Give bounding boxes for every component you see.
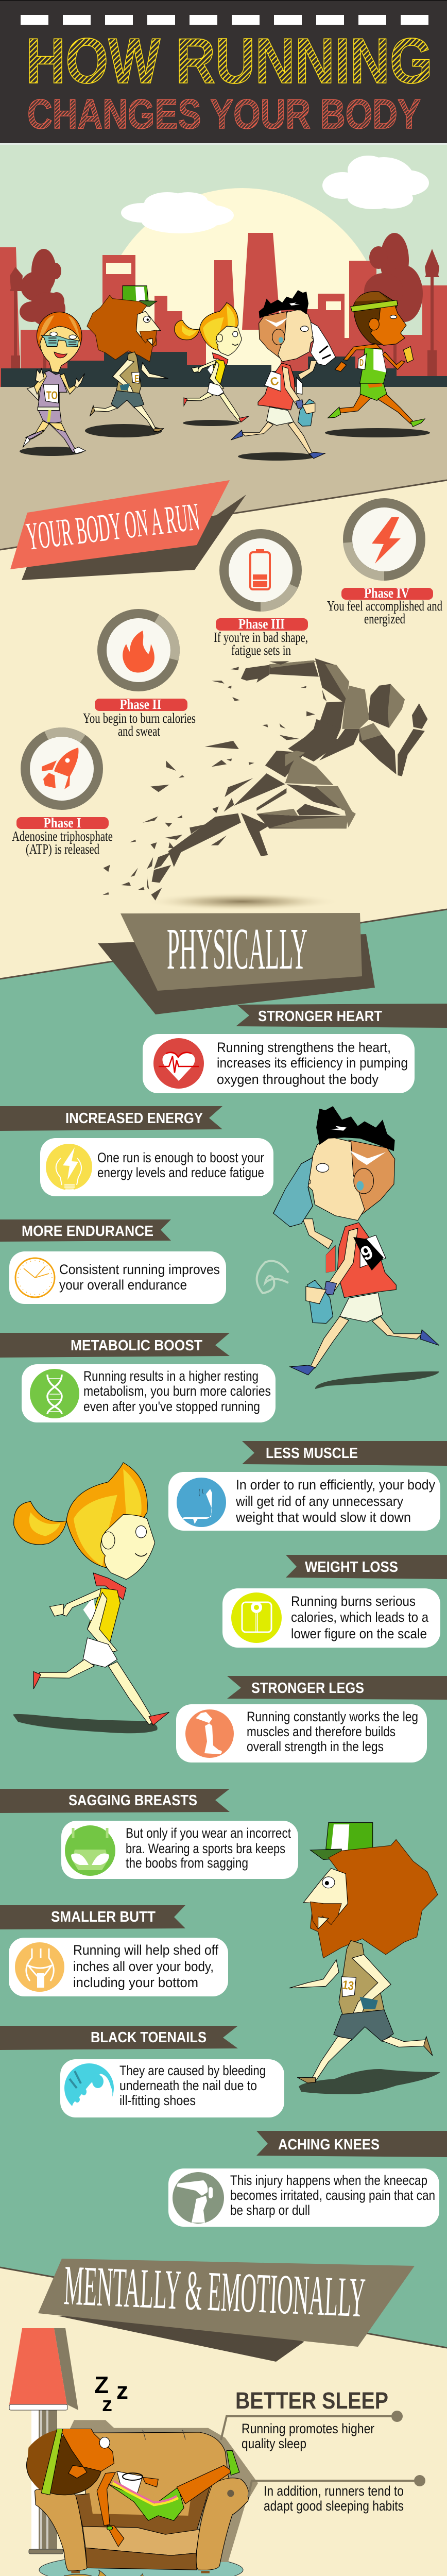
aching knees xyxy=(168,2131,447,2227)
bib number: 13 xyxy=(341,1978,355,1993)
more endurance: MORE ENDURANCE xyxy=(22,1223,153,1240)
banner: your body on a run: YOUR BODY ON A RUN xyxy=(24,495,202,558)
dark skyline xyxy=(1,352,447,387)
black toenails: underneath the nail due to xyxy=(119,2078,257,2093)
metabolic boost: Running results in a higher resting xyxy=(83,1368,259,1384)
sleeping z's xyxy=(94,2371,128,2416)
runner: blonde large xyxy=(13,1463,169,1733)
increased energy: One run is enough to boost your xyxy=(97,1150,264,1165)
icon: scale xyxy=(231,1592,282,1643)
sleeping z's: z xyxy=(102,2393,112,2416)
sleeping man xyxy=(26,2436,102,2495)
runner bib numbers: C xyxy=(268,374,281,389)
runner bib numbers: D xyxy=(359,358,364,368)
city scene background xyxy=(0,145,447,552)
rug xyxy=(39,2554,243,2576)
sagging breasts: the boobs from sagging xyxy=(126,1855,248,1871)
phase IV xyxy=(327,503,442,626)
banner: physically xyxy=(98,913,375,1014)
stronger heart: increases its efficiency in pumping xyxy=(217,1055,408,1071)
stronger heart xyxy=(143,1004,447,1093)
better sleep text: adapt good sleeping habits xyxy=(264,2498,404,2514)
runner bib numbers: TO xyxy=(46,389,58,402)
icon: heart xyxy=(153,1038,204,1089)
banner: your body on a run xyxy=(10,480,246,580)
teal towel xyxy=(273,1158,313,1227)
icon: dna xyxy=(30,1369,79,1418)
phase I: (ATP) is released xyxy=(26,841,99,857)
stronger heart: STRONGER HEART xyxy=(258,1008,382,1025)
more endurance xyxy=(0,1219,226,1304)
sleeping z's: z xyxy=(116,2377,128,2404)
better sleep text xyxy=(221,2387,425,2514)
metabolic boost: metabolism, you burn more calories xyxy=(83,1383,271,1399)
armchair xyxy=(85,2432,234,2517)
sagging breasts: But only if you wear an incorrect xyxy=(126,1825,291,1841)
cat xyxy=(61,2570,158,2576)
weight loss: calories, which leads to a xyxy=(291,1609,429,1625)
stronger legs: overall strength in the legs xyxy=(247,1739,384,1754)
icon: arm xyxy=(177,1478,226,1527)
cream mental section background xyxy=(0,2267,447,2576)
weight loss xyxy=(222,1555,447,1648)
smaller butt: Running will help shed off xyxy=(73,1942,218,1958)
sagging breasts: SAGGING BREASTS xyxy=(68,1792,197,1809)
more endurance: Consistent running improves xyxy=(59,1262,220,1277)
phase II: Phase II xyxy=(119,697,162,712)
floor lamp xyxy=(9,2328,78,2554)
weight loss: lower figure on the scale xyxy=(291,1626,427,1641)
icon: clock xyxy=(15,1258,55,1297)
cloud right xyxy=(322,156,429,209)
phase II: You begin to burn calories xyxy=(83,710,196,726)
black toenails: They are caused by bleeding xyxy=(119,2063,266,2078)
less muscle: will get rid of any unnecessary xyxy=(235,1494,403,1509)
increased energy: energy levels and reduce fatigue xyxy=(97,1165,264,1180)
less muscle xyxy=(168,1441,447,1531)
runner: blonde xyxy=(175,302,249,422)
stronger legs xyxy=(176,1676,447,1762)
phase I: Adenosine triphosphate xyxy=(12,828,113,844)
better sleep text: In addition, runners tend to xyxy=(264,2483,404,2499)
stronger legs: muscles and therefore builds xyxy=(247,1724,396,1739)
phase II xyxy=(83,614,196,739)
weight loss: WEIGHT LOSS xyxy=(305,1559,398,1575)
runner: black hair large: 9 xyxy=(357,1241,376,1265)
icon: knee xyxy=(173,2172,224,2224)
better sleep illustration: lamp, chair, man, cat xyxy=(9,2328,258,2576)
smaller butt: including your bottom xyxy=(73,1975,198,1990)
metabolic boost: METABOLIC BOOST xyxy=(71,1337,202,1354)
phase III xyxy=(214,534,308,658)
phase IV: Phase IV xyxy=(364,585,409,601)
runner bib numbers xyxy=(46,358,364,402)
runner: black hair xyxy=(231,290,336,459)
black toenails xyxy=(0,2026,284,2117)
green section background xyxy=(0,909,447,2348)
phase IV: energized xyxy=(364,611,405,626)
icon: light bulb xyxy=(46,1144,92,1190)
runner: beard xyxy=(87,286,168,432)
stronger legs: Running constantly works the leg xyxy=(247,1709,418,1724)
shattered runner silhouette xyxy=(102,658,427,911)
phase III: fatigue sets in xyxy=(231,642,291,658)
better sleep text: Running promotes higher xyxy=(242,2421,374,2436)
stronger heart: Running strengthens the heart, xyxy=(217,1040,391,1055)
black bib xyxy=(353,1237,384,1270)
black toenails: ill-fitting shoes xyxy=(119,2093,196,2108)
runner: black hair large xyxy=(257,1106,439,1389)
sagging breasts xyxy=(0,1789,298,1879)
less muscle: In order to run efficiently, your body xyxy=(236,1477,435,1493)
icon: sports bra xyxy=(65,1825,115,1876)
phase III: Phase III xyxy=(238,616,285,632)
cream section background with diagonal xyxy=(0,480,447,981)
metabolic boost: even after you've stopped running xyxy=(83,1399,260,1414)
runners group xyxy=(23,286,425,459)
cloud left xyxy=(121,192,234,233)
stronger legs: STRONGER LEGS xyxy=(251,1680,364,1697)
smaller butt: inches all over your body, xyxy=(73,1959,214,1974)
aching knees: be sharp or dull xyxy=(230,2202,310,2218)
smaller butt xyxy=(0,1905,228,1996)
trees xyxy=(20,233,423,387)
more endurance: your overall endurance xyxy=(59,1277,187,1293)
runner: beard large xyxy=(289,1823,440,2094)
smaller butt: SMALLER BUTT xyxy=(51,1909,156,1925)
increased energy: INCREASED ENERGY xyxy=(65,1110,203,1127)
less muscle: LESS MUSCLE xyxy=(266,1445,358,1462)
runner bib numbers: E xyxy=(134,374,139,384)
chair shadow xyxy=(65,2420,258,2562)
runner: dark skin xyxy=(328,292,425,427)
phase II: and sweat xyxy=(118,723,160,739)
icon: leg xyxy=(185,1709,234,1758)
weight loss: Running burns serious xyxy=(291,1594,416,1609)
less muscle: weight that would slow it down xyxy=(235,1510,411,1525)
black toenails: BLACK TOENAILS xyxy=(91,2029,207,2046)
metabolic boost xyxy=(0,1333,276,1422)
icon: butt xyxy=(15,1942,64,1992)
phase III: If you're in bad shape, xyxy=(214,630,308,645)
phase I xyxy=(12,732,113,857)
header band xyxy=(0,0,447,145)
lamps xyxy=(9,249,441,387)
phase I: Phase I xyxy=(43,815,81,831)
better sleep text: BETTER SLEEP xyxy=(235,2387,388,2414)
runner shadows xyxy=(20,420,430,461)
increased energy xyxy=(0,1106,273,1196)
sleeping z's: Z xyxy=(94,2371,109,2398)
better sleep text: quality sleep xyxy=(242,2436,306,2451)
aching knees: ACHING KNEES xyxy=(278,2137,380,2153)
stronger heart: oxygen throughout the body xyxy=(217,1072,379,1087)
runner: glasses xyxy=(23,312,85,454)
sagging breasts: bra. Wearing a sports bra keeps xyxy=(126,1841,285,1856)
icon: toes xyxy=(64,2063,114,2113)
